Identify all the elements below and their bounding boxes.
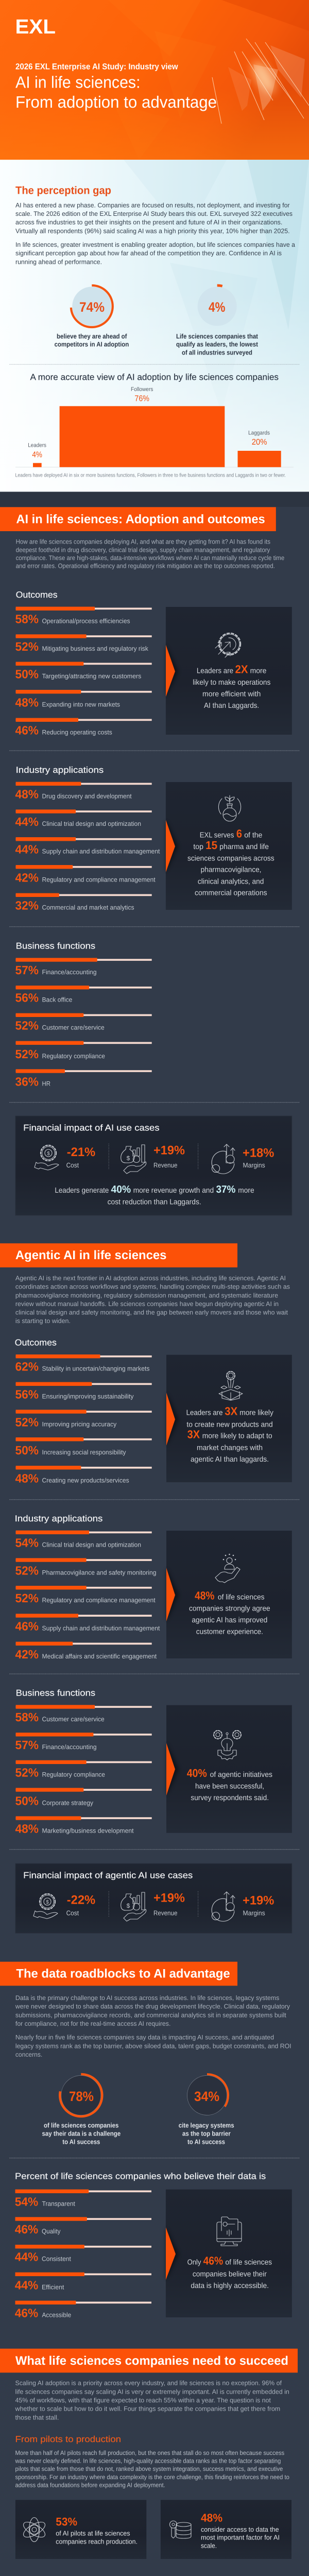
stat: margins +19% (243, 1894, 274, 1917)
stat: 4% qualify as leaders: Life sciences companies that (176, 332, 259, 340)
section: agentic AI (0, 1243, 299, 1933)
heading: percent who believe: Percent of life sciences companies who believe their data is (15, 2171, 266, 2181)
bar list: business functions: Finance/accounting (42, 969, 97, 976)
bar list: business functions: 57% (15, 963, 39, 977)
callout: 48% agree agentic AI improved customer experience: 48% (195, 1589, 214, 1602)
text block: agentic intro (15, 1275, 290, 1325)
stat: 4% qualify as leaders (176, 285, 259, 356)
bar list: agentic business functions: 58% (15, 1710, 39, 1724)
callout text: leaders generate: 37% (216, 1184, 236, 1195)
panel: financial impact of AI use cases: Financial impact of AI use cases (23, 1123, 160, 1132)
section: hero and perception gap (0, 0, 309, 492)
callout: EXL serves 6 of top 15: EXL serves (200, 831, 234, 839)
callout: leaders 3X more likely: 3X (225, 1405, 237, 1418)
bar list: industry applications: 44% (15, 843, 39, 856)
bar list: agentic industry applications: 42% (15, 1648, 39, 1661)
stat: margins +18%: Margins (243, 1161, 265, 1169)
callout: leaders 2X more likely (166, 607, 292, 735)
stat: 74% ahead of competitors (55, 285, 129, 348)
bar list: data qualities: Efficient (42, 2283, 64, 2291)
icon: atom (21, 2517, 47, 2542)
callout: leaders 2X more likely: AI than Laggards. (204, 702, 259, 710)
callout: leaders 2X more likely: more efficient with (202, 690, 261, 698)
bar list: agentic business functions: Customer care/service (42, 1716, 105, 1723)
callout: EXL serves 6 of top 15: 6 (236, 827, 242, 840)
banner: need to succeed (0, 2349, 298, 2372)
bar list: agentic industry applications: Clinical trial design and optimization (42, 1541, 141, 1549)
bar list: agentic outcomes: Improving pricing accuracy (42, 1420, 117, 1428)
text block: agentic intro: coordinates action across workflows and systems, handling complex multi-step activities such as (15, 1283, 290, 1291)
text block: roadblocks intro (15, 1994, 291, 2058)
stat card: 53% pilots reach production: of AI pilots at life sciences (56, 2530, 130, 2537)
bar list: outcomes: Reducing operating costs (42, 729, 112, 736)
icon: hand with dollar gear: $ (47, 1151, 50, 1157)
stat: 34% cite legacy systems: cite legacy systems (179, 2122, 234, 2129)
stat: cost -22% (66, 1893, 95, 1917)
bar list: business functions: 52% (15, 1019, 39, 1032)
stat: margins +18% (243, 1146, 274, 1169)
icon: money bag and bars: $ (127, 1155, 130, 1162)
stat: 78% say data is a challenge (42, 2074, 121, 2145)
stat card: 48% access to data: scale. (201, 2541, 217, 2549)
callout: EXL serves 6 of top 15: top (193, 843, 203, 851)
bar list: data qualities: Quality (42, 2228, 61, 2235)
stat card: 53% pilots reach production (15, 2500, 146, 2559)
panel: the perception gap (0, 160, 309, 492)
panel: financial impact of AI use cases (15, 1116, 292, 1215)
bar list: agentic outcomes: Stability in uncertain/changing markets (42, 1365, 149, 1372)
stat card: 53% pilots reach production: companies reach production. (56, 2537, 138, 2545)
stat: margins +18%: +18% (243, 1146, 274, 1160)
bar list: business functions: 56% (15, 991, 39, 1005)
stat: margins +19%: +19% (243, 1894, 274, 1908)
text block: agentic intro: Agentic AI is the next frontier in AI adoption across industries, including life sciences. Agentic AI (15, 1275, 286, 1282)
bar list: industry applications: Drug discovery and development (42, 792, 132, 800)
icon: money bag and bars (121, 1892, 146, 1921)
text block: pilots: was never clearly defined. In life sciences, high-quality accessible data ranks as the top factor separating (15, 2458, 281, 2465)
panel: financial impact of agentic AI: Financial impact of agentic AI use cases (23, 1871, 193, 1880)
banner: agentic AI in life sciences: Agentic AI in life sciences (15, 1248, 166, 1262)
text block: roadblocks intro: Nearly four in five life sciences companies say data is impacting AI success, and antiquated (15, 2033, 274, 2041)
callout text: leaders generate: more revenue growth and (133, 1187, 214, 1195)
banner: data roadblocks: The data roadblocks to AI advantage (16, 1967, 230, 1980)
callout: 48% agree agentic AI improved customer experience: customer experience. (196, 1628, 263, 1636)
stat: 74% ahead of competitors: 74% (79, 299, 105, 315)
callout: leaders 3X more likely: market changes with (197, 1444, 263, 1452)
callout: 40% of agentic initiatives successful: survey respondents said. (191, 1794, 269, 1802)
eyebrow heading: 2026 EXL Enterprise AI Study: Industry view (15, 62, 178, 71)
text block: roadblocks intro: were never designed to share data across the drug development lifecycle. Clinical data, regulatory (15, 2003, 290, 2010)
callout text: leaders generate (55, 1184, 254, 1206)
icon: person on hand with stars (215, 1554, 240, 1583)
text block: perception gap intro (15, 201, 295, 266)
heading: from pilots to production: From pilots to production (15, 2434, 121, 2444)
text block: perception gap intro: running ahead of performance. (15, 259, 102, 266)
bar list: agentic outcomes: Creating new products/services (42, 1477, 129, 1484)
icon: hand with dollar gear (33, 1894, 58, 1919)
bar list: agentic business functions: 57% (15, 1738, 39, 1752)
text block: adoption intro: How are life sciences companies deploying AI, and what are they getting from it? AI has found its (16, 538, 270, 545)
stat: revenue +19%: Revenue (153, 1161, 177, 1169)
bar list: agentic outcomes: 48% (15, 1471, 39, 1485)
text block: scaling intro: those that stall. (15, 2414, 59, 2421)
text block: adoption intro: compliance. These are high-stakes, data-intensive workflows where AI can materially reduce cycle time (16, 554, 284, 562)
text block: scaling intro: Scaling AI adoption is a priority across every industry, and life sciences is no exception. 96% of (15, 2380, 282, 2387)
banner: agentic AI in life sciences (0, 1243, 237, 1267)
icon: key and database (170, 2521, 191, 2538)
stat: 34% cite legacy systems: as the top barrier (182, 2130, 231, 2138)
callout: EXL serves 6 of top 15: of the (244, 831, 262, 839)
heading: industry applications: Industry applications (16, 765, 104, 775)
text block: scaling intro: 45% of workflows, with that figure expected to reach 55% within a year. The question is not (15, 2397, 271, 2404)
bar list: agentic outcomes: Ensuring/improving sustainability (42, 1393, 134, 1400)
callout: EXL serves 6 of top 15: sciences companies across (187, 854, 274, 862)
bar list: data qualities: 54% (15, 2195, 38, 2208)
callout: leaders 3X more likely (166, 1355, 292, 1482)
callout: 48% agree agentic AI improved customer experience: of life sciences (218, 1593, 265, 1601)
bar list: agentic business functions: Marketing/business development (42, 1827, 134, 1834)
bar list: agentic industry applications: 52% (15, 1591, 39, 1605)
text block: perception gap intro: across five industries to get their insights on the present and future of AI in their organizations. (15, 219, 282, 226)
bar chart: leaders, followers, laggards: Followers (131, 386, 153, 393)
banner: data roadblocks (0, 1962, 237, 1986)
bar list: industry applications (15, 782, 160, 912)
text block: scaling intro: whether to scale but how to do it well. Four things separate the companies that get there from (15, 2405, 280, 2413)
stat: revenue +19%: Revenue (153, 1909, 177, 1917)
text block: scaling intro (15, 2380, 289, 2421)
stat: cost -22%: -22% (67, 1893, 95, 1907)
heading: agentic industry applications: Industry applications (15, 1514, 102, 1523)
stat: 34% cite legacy systems (179, 2074, 234, 2145)
icon: pie with arrows (212, 1144, 235, 1174)
bar list: data qualities: 46% (15, 2306, 38, 2319)
text block: roadblocks intro: submissions, pharmacovigilance records, and commercial analytics sit in separate systems built (15, 2011, 286, 2019)
bar list: agentic industry applications: 54% (15, 1536, 39, 1550)
icon: open box with gear and stars (219, 1371, 243, 1400)
callout: leaders 3X more likely: agentic AI than laggards. (191, 1455, 269, 1464)
stat: 78% say data is a challenge: 78% (69, 2089, 94, 2104)
bar list: business functions: 36% (15, 1075, 39, 1088)
bar list: outcomes: 48% (15, 696, 39, 709)
stat card: 53% pilots reach production: 53% (56, 2515, 77, 2528)
text block: roadblocks intro: concerns. (15, 2051, 42, 2058)
bar chart: leaders, followers, laggards: Laggards (248, 430, 270, 436)
text block: pilots: More than half of AI pilots reach full production, but the ones that stall do so most often because success (15, 2449, 284, 2456)
callout: leaders 2X more likely: 2X (235, 663, 248, 676)
bar chart: leaders, followers, laggards: 76% (134, 395, 149, 403)
callout: EXL serves 6 of top 15 (166, 782, 292, 910)
stat: 78% say data is a challenge: say their data is a challenge (42, 2130, 121, 2138)
icon: money bag and bars: $ (127, 1902, 130, 1909)
title: From adoption to advantage (15, 93, 217, 111)
heading: agentic business functions: Business functions (16, 1688, 95, 1698)
section: what companies need to succeed (0, 2348, 298, 2576)
bar list: industry applications: 42% (15, 871, 39, 885)
icon: key in folder on monitor (217, 2217, 242, 2246)
bar list: agentic outcomes: 62% (15, 1360, 39, 1374)
callout: only 46% data accessible: of life sciences (225, 2259, 272, 2267)
text block: scaling intro: life sciences companies say scaling AI is very or extremely important. AI is currently embedded in (15, 2388, 289, 2395)
bar list: data qualities: Transparent (42, 2200, 75, 2207)
bar list: industry applications: 48% (15, 787, 39, 801)
callout text: leaders generate: more (238, 1187, 254, 1195)
stat: cost -21% (66, 1145, 95, 1169)
text block: pilots (15, 2449, 289, 2489)
bar list: business functions: Back office (42, 996, 72, 1004)
text block: perception gap intro: scale. The 2026 edition of the EXL Enterprise AI Study bears this out. EXL surveyed 322 executives (15, 210, 293, 217)
bar list: agentic business functions: 52% (15, 1766, 39, 1780)
bar list: business functions (15, 958, 152, 1088)
callout: EXL serves 6 of top 15: clinical analytics, and (198, 877, 264, 886)
bar list: industry applications: 44% (15, 815, 39, 828)
callout: leaders 3X more likely: 3X (187, 1428, 200, 1441)
text block: roadblocks intro: legacy systems rank as the top barrier, above siloed data, talent gaps, budget constraints, and ROI (15, 2042, 291, 2049)
text block: pilots: address data foundations before expanding AI deployment. (15, 2482, 165, 2489)
icon: money bag and bars (121, 1145, 146, 1174)
bar list: outcomes: Targeting/attracting new customers (42, 673, 141, 680)
bar chart: leaders, followers, laggards: Leaders (28, 443, 46, 449)
stat: 4% qualify as leaders: of all industries surveyed (182, 348, 252, 356)
heading: business functions: Business functions (16, 941, 95, 951)
bar list: outcomes: Expanding into new markets (42, 701, 120, 708)
logo: EXL: EXL (15, 15, 56, 38)
text block: adoption intro (16, 538, 284, 570)
text block: roadblocks intro: Data is the primary challenge to AI success across industries. In life sciences, legacy systems (15, 1994, 279, 2002)
stat card: 48% access to data: 48% (201, 2511, 222, 2524)
bar list: business functions: Regulatory compliance (42, 1053, 105, 1060)
stat: 74% ahead of competitors: believe they are ahead of (57, 332, 127, 340)
bar list: agentic business functions: 50% (15, 1794, 39, 1807)
bar list: industry applications: Regulatory and compliance management (42, 876, 156, 884)
bar list: data qualities: 44% (15, 2278, 38, 2292)
stat: 78% say data is a challenge: of life sciences companies (44, 2122, 118, 2129)
bar list: outcomes: 52% (15, 640, 39, 653)
banner: adoption and outcomes (0, 507, 276, 531)
bar list: agentic industry applications: Medical affairs and scientific engagement (42, 1653, 157, 1660)
bar list: agentic industry applications: Pharmacovigilance and safety monitoring (42, 1569, 157, 1576)
banner: adoption and outcomes: AI in life sciences: Adoption and outcomes (16, 513, 265, 527)
bar list: outcomes: 50% (15, 668, 39, 681)
bar list: agentic outcomes (15, 1354, 152, 1485)
section: adoption and outcomes (0, 507, 299, 1216)
callout: 40% of agentic initiatives successful: 40% (187, 1767, 207, 1780)
icon: gear with arrows (215, 633, 241, 657)
callout: only 46% data accessible: companies believe their (193, 2270, 267, 2278)
bar list: outcomes (15, 607, 152, 737)
bar list: outcomes: 58% (15, 612, 39, 625)
callout: 40% of agentic initiatives successful: have been successful, (195, 1782, 264, 1790)
heading: agentic outcomes: Outcomes (15, 1337, 57, 1347)
text block: adoption intro: deepest foothold in drug discovery, clinical trial design, supply chain management, and regulatory (16, 546, 270, 553)
bar list: agentic industry applications: 46% (15, 1620, 39, 1633)
text block: pilots: pilots that scale from those that do not, ranked above system integration, success metrics, and executive (15, 2465, 283, 2472)
callout: 48% agree agentic AI improved customer experience: companies strongly agree (189, 1605, 270, 1613)
title: AI in life sciences: (15, 73, 140, 92)
callout: leaders 3X more likely: to create new products and (186, 1420, 273, 1429)
stat: 34% cite legacy systems: 34% (194, 2089, 219, 2104)
bar list: agentic business functions (15, 1705, 152, 1835)
text block: adoption intro: and error rates. Operational efficiency and regulatory risk mitigation are the top outcomes reported. (16, 563, 275, 570)
text block: perception gap intro: In life sciences, greater investment is enabling greater adoption, but life sciences companies have a (15, 241, 295, 248)
stat: 4% qualify as leaders: 4% (209, 299, 226, 315)
callout: leaders 2X more likely: more (250, 667, 266, 675)
panel: hero header (0, 0, 309, 160)
bar list: agentic outcomes: 56% (15, 1387, 39, 1401)
bar list: agentic business functions: Finance/accounting (42, 1743, 97, 1751)
section: data roadblocks (0, 1962, 299, 2319)
bar list: agentic industry applications: Supply chain and distribution management (42, 1625, 160, 1632)
text block: perception gap intro: significant perception gap about how far ahead of the competition they are. Confidence in AI is (15, 250, 282, 257)
bar list: data qualities (15, 2190, 151, 2319)
bar list: outcomes: Operational/process efficiencies (42, 617, 130, 624)
bar list: business functions: Customer care/service (42, 1024, 105, 1031)
stat: revenue +19% (153, 1143, 185, 1169)
bar list: data qualities: 46% (15, 2223, 38, 2236)
callout: EXL serves 6 of top 15: pharma and life (219, 843, 269, 851)
bar list: outcomes: Mitigating business and regulatory risk (42, 645, 149, 652)
icon: light streak decoration (212, 39, 309, 124)
callout text: leaders generate: 40% (111, 1184, 131, 1195)
callout text: leaders generate: cost reduction than Laggards. (108, 1198, 201, 1206)
text block: agentic intro: review without manual handoffs. Life sciences companies have begun deploying agentic AI in (15, 1300, 279, 1308)
bar list: industry applications: Supply chain and distribution management (42, 848, 160, 855)
stat: margins +19%: Margins (243, 1909, 265, 1917)
text block: agentic intro: clinical trial design and safety monitoring, and the gap between early movers and those who wait (15, 1309, 288, 1316)
callout: EXL serves 6 of top 15: commercial operations (195, 889, 267, 897)
callout: leaders 2X more likely: Leaders are (197, 667, 233, 675)
stat: revenue +19% (153, 1891, 185, 1917)
stat card: 48% access to data (161, 2500, 291, 2559)
icon: pie with arrows (212, 1892, 235, 1921)
callout: 40% of agentic initiatives successful: of agentic initiatives (210, 1771, 272, 1779)
bar list: industry applications: Commercial and market analytics (42, 904, 134, 911)
callout: leaders 3X more likely: more likely to adapt to (202, 1432, 272, 1440)
banner: need to succeed: What life sciences companies need to succeed (15, 2354, 288, 2368)
bar list: agentic industry applications: 52% (15, 1564, 39, 1577)
heading: adoption chart title: A more accurate view of AI adoption by life sciences companies (30, 372, 279, 382)
bar list: agentic outcomes: 50% (15, 1444, 39, 1457)
text block: agentic intro: is starting to widen. (15, 1317, 71, 1325)
callout: leaders 3X more likely: more likely (239, 1409, 274, 1417)
bar list: agentic outcomes: Increasing social responsibility (42, 1449, 126, 1456)
bar list: business functions: 52% (15, 1047, 39, 1061)
callout: only 46% data accessible: data is highly accessible. (191, 2282, 269, 2290)
stat: 34% cite legacy systems: to AI success (187, 2138, 225, 2145)
stat: 78% say data is a challenge: to AI success (62, 2138, 100, 2145)
callout: only 46% data accessible: 46% (203, 2255, 223, 2267)
bar list: data qualities: 44% (15, 2250, 38, 2264)
stat: 74% ahead of competitors: competitors in AI adoption (55, 341, 129, 348)
callout text: leaders generate: Leaders generate (55, 1187, 109, 1195)
stat: revenue +19%: +19% (153, 1143, 185, 1157)
callout: leaders 2X more likely: likely to make operations (193, 679, 270, 687)
stat: revenue +19%: +19% (153, 1891, 185, 1905)
icon: hand with dollar gear (35, 1145, 59, 1170)
bar list: agentic outcomes: 52% (15, 1415, 39, 1429)
callout: only 46% data accessible: Only (187, 2259, 201, 2267)
callout: 48% agree agentic AI improved customer experience (166, 1531, 292, 1658)
bar chart: leaders, followers, laggards: 20% (252, 438, 267, 447)
stat card: 48% access to data: consider access to data the (201, 2526, 279, 2533)
bar list: data qualities: Consistent (42, 2256, 71, 2263)
bar chart: leaders, followers, laggards (15, 386, 294, 467)
bar list: industry applications: 32% (15, 899, 39, 912)
callout: leaders 3X more likely: Leaders are (186, 1409, 222, 1417)
text block: perception gap intro: AI has entered a new phase. Companies are focused on results, not deployment, and investing for (15, 201, 289, 209)
stat: cost -21%: Cost (66, 1161, 79, 1169)
heading: the perception gap: The perception gap (15, 185, 111, 197)
icon: hand with dollar gear: $ (46, 1900, 49, 1905)
icon: lightbulb with gears (214, 1731, 241, 1760)
bar list: agentic business functions: Regulatory compliance (42, 1771, 105, 1778)
icon: flask with plant (218, 795, 241, 821)
callout: only 46% data accessible (166, 2190, 292, 2317)
bar list: agentic business functions: Corporate strategy (42, 1799, 94, 1806)
bar list: outcomes: 46% (15, 724, 39, 737)
callout: 48% agree agentic AI improved customer experience: agentic AI has improved (192, 1616, 267, 1624)
panel: financial impact of agentic AI (15, 1863, 292, 1933)
bar list: agentic industry applications: Regulatory and compliance management (42, 1597, 156, 1604)
bar list: data qualities: Accessible (42, 2311, 71, 2318)
stat: cost -22%: Cost (66, 1909, 79, 1917)
bar list: agentic business functions: 48% (15, 1822, 39, 1835)
title (15, 73, 217, 111)
text block: agentic intro: pharmacovigilance monitoring, regulatory submission management, and systematic literature (15, 1292, 278, 1299)
text block: perception gap intro: Virtually all respondents (96%) said scaling AI was a high priority this year, 10% higher than 2025. (15, 227, 289, 234)
callout: EXL serves 6 of top 15: 15 (205, 839, 217, 852)
callout: 40% of agentic initiatives successful (166, 1705, 292, 1833)
bar list: agentic industry applications (15, 1531, 160, 1661)
callout: EXL serves 6 of top 15: pharmacovigilance, (201, 866, 262, 874)
text block: roadblocks intro: for compliance, not for the real-time access AI requires. (15, 2020, 170, 2027)
heading: outcomes: Outcomes (16, 590, 58, 600)
text block: pilots: sponsorship. For an industry where data complexity is the core challenge, this finding reinforces the need to (15, 2473, 289, 2481)
bar chart: leaders, followers, laggards: 4% (32, 450, 42, 459)
bar list: business functions: HR (42, 1080, 50, 1087)
stat: 4% qualify as leaders: qualify as leaders, the lowest (176, 341, 259, 348)
stat card: 48% access to data: most important factor for AI (201, 2534, 280, 2541)
stat: cost -21%: -21% (67, 1145, 95, 1159)
bar list: industry applications: Clinical trial design and optimization (42, 820, 141, 827)
